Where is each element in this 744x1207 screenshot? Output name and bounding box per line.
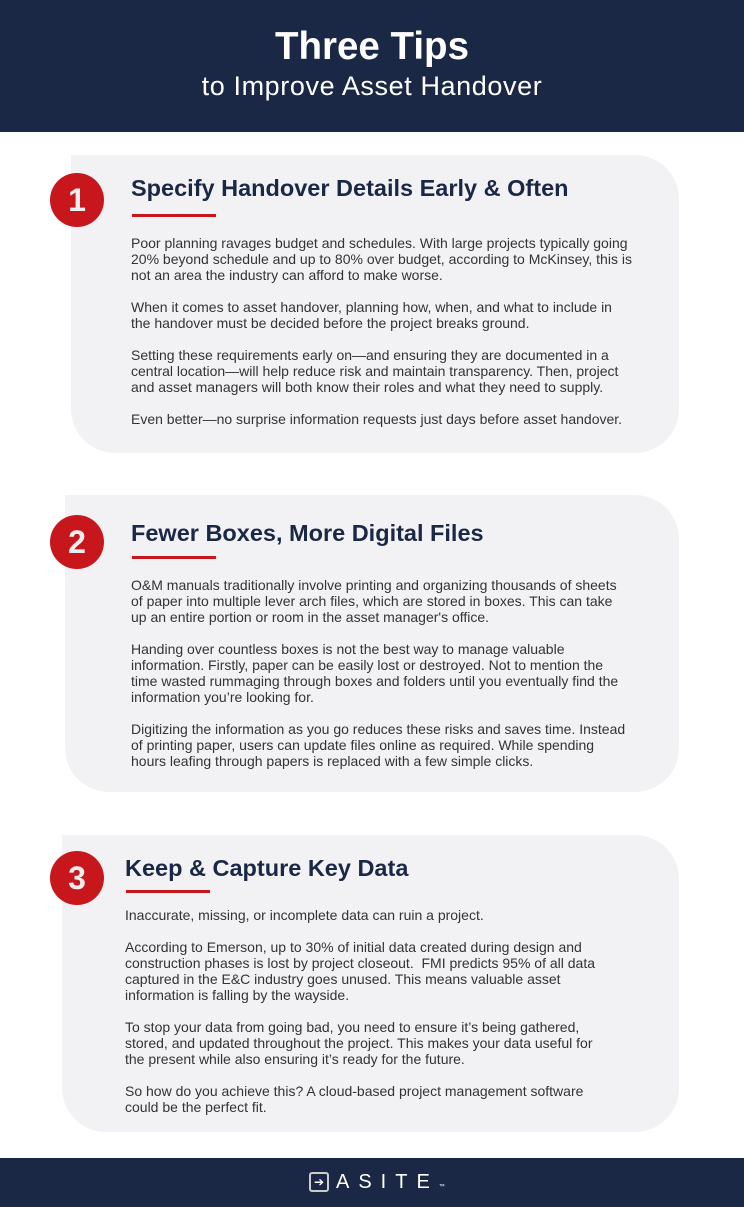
header: Three Tips (275, 25, 469, 68)
text 2: information. Firstly, paper can be easily lost or destroyed. Not to mention the (131, 657, 603, 673)
header (0, 0, 744, 132)
text 3: Inaccurate, missing, or incomplete data can ruin a project. (125, 907, 484, 923)
text 2: hours leafing through papers is replaced with a few simple clicks. (131, 753, 533, 769)
text 3: To stop your data from going bad, you need to ensure it’s being gathered, (125, 1019, 579, 1035)
text 2: of printing paper, users can update files online as required. While spending (131, 737, 594, 753)
text 1 (131, 235, 632, 427)
footer logo: ASITE™ (336, 1171, 445, 1193)
text 3: the present while also ensuring it’s ready for the future. (125, 1051, 465, 1067)
text 1: Setting these requirements early on—and ensuring they are documented in a (131, 347, 609, 363)
text 3: information is falling by the wayside. (125, 987, 349, 1003)
heading 3: Keep & Capture Key Data (125, 855, 408, 881)
text 3: stored, and updated throughout the project. This makes your data useful for (125, 1035, 592, 1051)
header: to Improve Asset Handover (202, 71, 542, 101)
footer logo (0, 1158, 744, 1207)
text 2: up an entire portion or room in the asset manager's office. (131, 609, 489, 625)
text 1: Poor planning ravages budget and schedules. With large projects typically going (131, 235, 628, 251)
icon: number 3: 3 (68, 860, 86, 896)
text 2: O&M manuals traditionally involve printing and organizing thousands of sheets (131, 577, 617, 593)
text 1: When it comes to asset handover, planning how, when, and what to include in (131, 299, 612, 315)
text 2: information you’re looking for. (131, 689, 314, 705)
text 1: central location—will help reduce risk and maintain transparency. Then, project (131, 363, 618, 379)
heading 1: Specify Handover Details Early & Often (131, 175, 569, 201)
icon: number 1 (50, 173, 104, 227)
text 1: 20% beyond schedule and up to 80% over budget, according to McKinsey, this is (131, 251, 632, 267)
text 1: the handover must be decided before the project breaks ground. (131, 315, 529, 331)
text 3 (125, 907, 596, 1115)
text 2: time wasted rummaging through boxes and folders until you eventually find the (131, 673, 618, 689)
panel: tip 3 (62, 835, 679, 1132)
text 3: could be the perfect fit. (125, 1099, 267, 1115)
icon: number 2: 2 (68, 524, 86, 560)
text 3: captured in the E&C industry goes unused. This means valuable asset (125, 971, 561, 987)
footer logo: ➔ (314, 1175, 324, 1189)
panel: tip 2 (65, 495, 679, 792)
text 2 (131, 577, 625, 769)
icon: number 1: 1 (68, 182, 86, 218)
text 2: Handing over countless boxes is not the best way to manage valuable (131, 641, 564, 657)
text 1: Even better—no surprise information requests just days before asset handover. (131, 411, 622, 427)
text 1: not an area the industry can afford to make worse. (131, 267, 443, 283)
text 3: construction phases is lost by project closeout. FMI predicts 95% of all data (125, 955, 595, 971)
text 1: and asset managers will both know their roles and what they need to supply. (131, 379, 603, 395)
panel: tip 1 (71, 155, 679, 453)
text 2: of paper into multiple lever arch files, which are stored in boxes. This can take (131, 593, 612, 609)
text 2: Digitizing the information as you go reduces these risks and saves time. Instead (131, 721, 625, 737)
text 3: According to Emerson, up to 30% of initial data created during design and (125, 939, 582, 955)
text 3: So how do you achieve this? A cloud-based project management software (125, 1083, 583, 1099)
heading 2: Fewer Boxes, More Digital Files (131, 520, 484, 546)
icon: number 3 (50, 851, 104, 905)
icon: number 2 (50, 515, 104, 569)
